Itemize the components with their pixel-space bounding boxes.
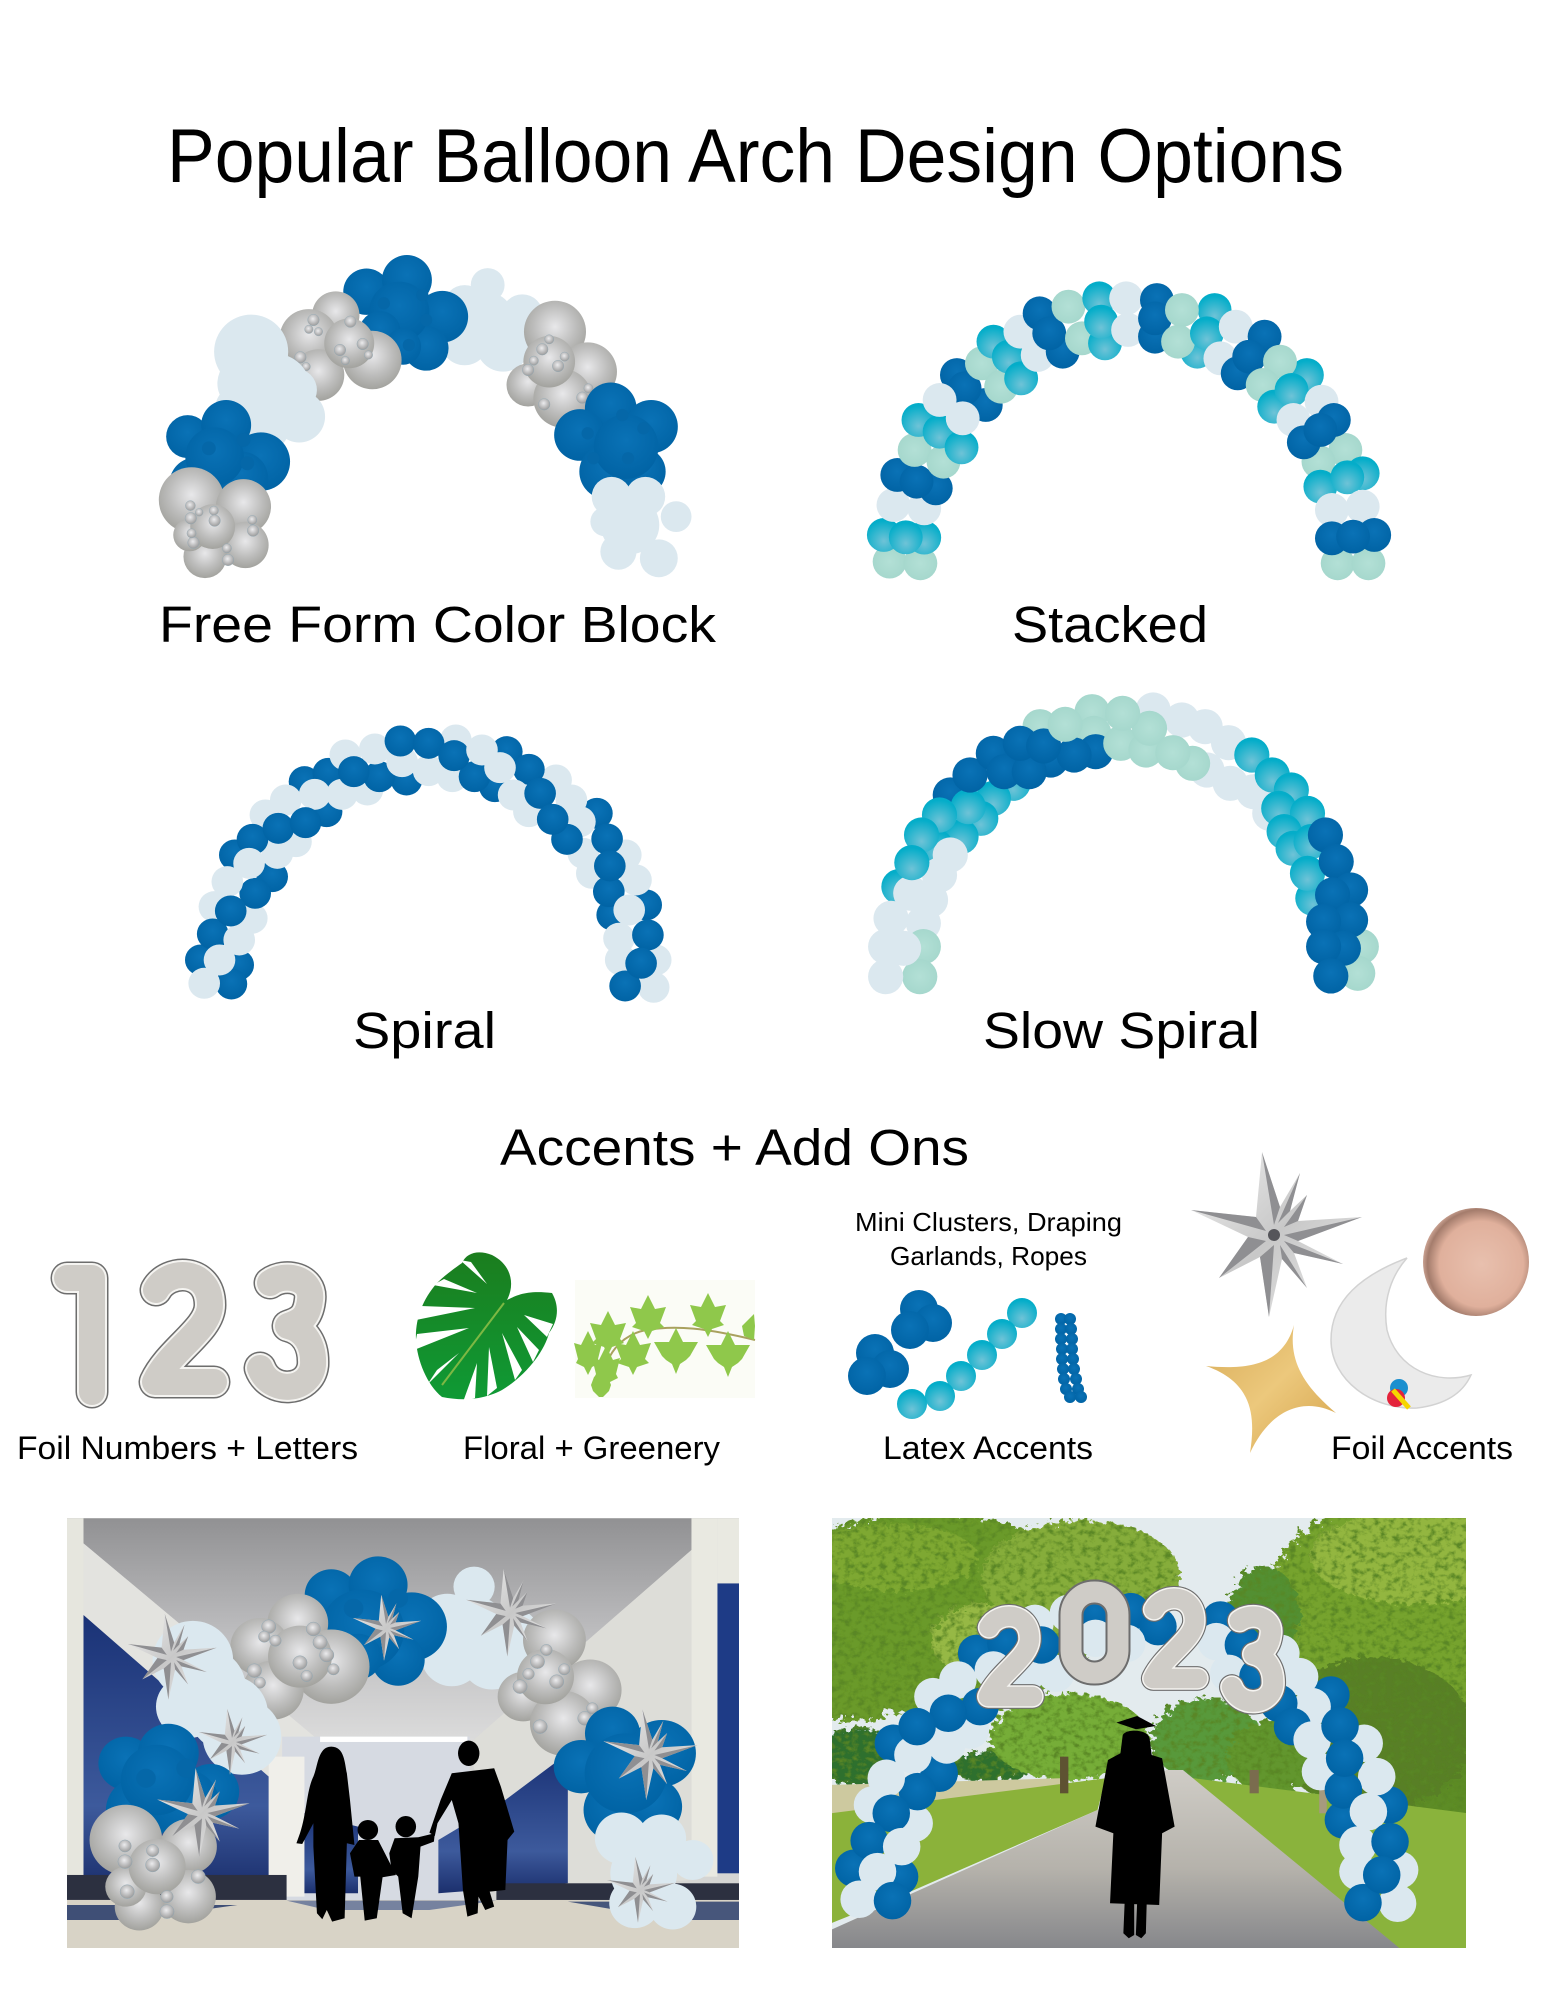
icon: white crescent moon — [1331, 1258, 1471, 1408]
panel: latex accents — [848, 1207, 1122, 1466]
label: foil accents: Foil Accents — [1331, 1430, 1513, 1466]
balloon arch: spiral — [185, 724, 672, 1003]
label: stacked: Stacked — [1012, 596, 1208, 653]
panel: spiral arch — [185, 724, 672, 1059]
icon: monstera leaf — [414, 1252, 557, 1402]
photo panel: school hallway arch — [63, 1517, 746, 1950]
caption: mini clusters — [855, 1207, 1122, 1271]
icon: mini clusters — [848, 1290, 952, 1395]
graduate silhouette — [1095, 1716, 1175, 1938]
caption: mini clusters: Garlands, Ropes — [890, 1241, 1087, 1271]
label: floral and greenery: Floral + Greenery — [463, 1430, 720, 1466]
panel: foil numbers and letters — [17, 1275, 358, 1466]
label: latex accents: Latex Accents — [883, 1430, 1093, 1466]
balloon arch: spiral with foil 2023 — [835, 1593, 1418, 1922]
balloon arch with starbursts — [90, 1556, 713, 1930]
foil numbers 2023 — [988, 1592, 1273, 1702]
panel: foil accents — [1191, 1152, 1529, 1466]
icon: rose gold orb — [1423, 1208, 1529, 1316]
panel: slow spiral arch — [868, 692, 1379, 1059]
label: free form color block: Free Form Color Block — [159, 596, 717, 653]
icon: ivy vine — [574, 1280, 755, 1398]
panel: floral and greenery — [414, 1252, 755, 1466]
park background — [832, 1518, 1466, 1948]
starbursts on hallway arch — [128, 1569, 697, 1923]
label: slow spiral: Slow Spiral — [983, 1002, 1260, 1059]
icon: draping garland — [897, 1298, 1037, 1419]
title: Popular Balloon Arch Design Options — [167, 114, 1344, 199]
photo panel: outdoor graduation arch — [832, 1518, 1466, 1948]
hallway background — [63, 1517, 746, 1950]
icon: gold four point star — [1206, 1325, 1336, 1453]
label: spiral: Spiral — [353, 1002, 496, 1059]
icon: foil digits 1 2 3 — [67, 1275, 313, 1392]
icon: balloon rope — [1055, 1313, 1087, 1403]
balloon arch: free form color block — [159, 255, 692, 578]
icon: silver starburst — [1191, 1152, 1362, 1317]
heading: accents and add ons: Accents + Add Ons — [500, 1119, 969, 1176]
balloon arch: stacked — [867, 281, 1391, 580]
panel: free form color block arch — [159, 255, 717, 653]
panel: stacked arch — [867, 281, 1391, 653]
label: foil numbers and letters: Foil Numbers + Letters — [17, 1430, 358, 1466]
balloon arch: slow spiral — [868, 692, 1379, 994]
family silhouette — [296, 1741, 514, 1922]
caption: mini clusters: Mini Clusters, Draping — [855, 1207, 1122, 1237]
